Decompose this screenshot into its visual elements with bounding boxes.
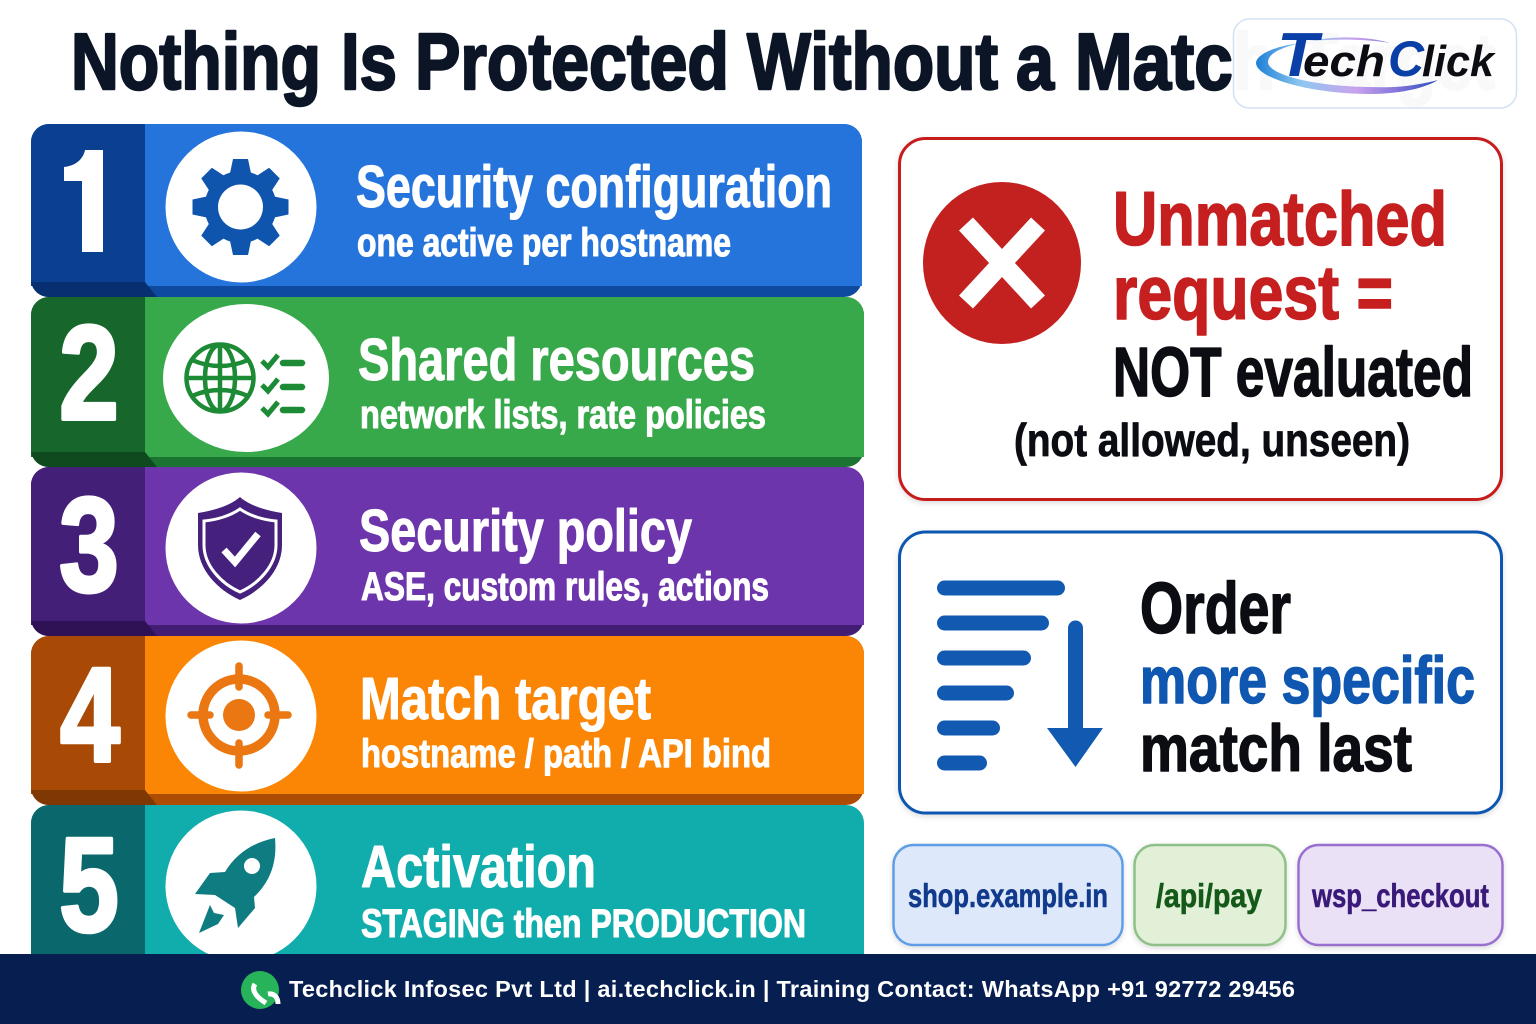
step 4: match target — [31, 636, 864, 805]
subheading: activation: STAGING then PRODUCTION — [361, 902, 806, 946]
logo wordmark — [1277, 21, 1496, 90]
text: order: Order — [1140, 569, 1291, 649]
text: not allowed, unseen: (not allowed, unseen) — [1014, 414, 1410, 466]
title: Is — [341, 17, 397, 106]
subheading: match target: hostname / path / API bind — [361, 732, 771, 776]
heading: shared resources: Shared resources — [358, 327, 755, 393]
heading: activation: Activation — [361, 834, 596, 900]
number 1 — [64, 150, 103, 252]
panel: order — [900, 532, 1502, 813]
title — [71, 17, 1495, 106]
title: Match — [1075, 17, 1275, 106]
number 4: 4 — [60, 640, 120, 790]
step 1: security configuration — [31, 124, 862, 297]
subheading: security configuration: one active per hostname — [357, 221, 731, 265]
logo swoosh — [1256, 37, 1438, 94]
footer bar — [0, 954, 1536, 1024]
title: Protected — [415, 17, 729, 106]
icon: target — [166, 640, 316, 792]
footer text: Techclick Infosec Pvt Ltd | ai.techclick.in | Training Contact: WhatsApp +91 92772 29456 — [289, 976, 1295, 1002]
title: a — [1016, 17, 1054, 106]
heading: security policy: Security policy — [359, 498, 692, 564]
step 2: shared resources — [31, 297, 864, 467]
icon: descending list with arrow — [937, 580, 1103, 770]
subheading: shared resources: network lists, rate policies — [360, 393, 766, 437]
text: request equals: request = — [1113, 251, 1393, 336]
number 5: 5 — [59, 810, 119, 960]
title: Target — [1298, 17, 1495, 106]
chip: path: /api/pay — [1156, 877, 1263, 914]
title: Without — [747, 17, 998, 106]
subheading: security policy: ASE, custom rules, actions — [361, 565, 769, 609]
number 1: 1 — [56, 126, 126, 282]
heading: security configuration: Security configuration — [356, 154, 832, 220]
number 2: 2 — [59, 298, 119, 448]
panel: unmatched request — [900, 138, 1502, 500]
step 3: security policy — [31, 467, 864, 636]
icon: whatsapp phone — [241, 971, 279, 1009]
logo wordmark: T — [1277, 21, 1324, 90]
icon: shield — [166, 472, 316, 624]
chip: policy: wsp_checkout — [1311, 877, 1489, 914]
icon: red cross — [923, 182, 1081, 344]
chip: hostname — [894, 845, 1122, 945]
chip: path — [1134, 845, 1286, 945]
heading: match target: Match target — [360, 666, 651, 732]
logo wordmark: lick — [1422, 37, 1496, 86]
chip: policy — [1298, 845, 1502, 945]
icon: gear — [166, 132, 316, 282]
logo card — [1234, 19, 1516, 108]
text: unmatched: Unmatched — [1113, 177, 1447, 262]
icon: rocket — [166, 810, 316, 962]
number 3: 3 — [59, 470, 119, 620]
text: match last: match last — [1140, 711, 1412, 785]
logo wordmark: ech — [1303, 37, 1385, 86]
chip: hostname: shop.example.in — [908, 877, 1108, 914]
icon: globe and checklist — [163, 304, 329, 452]
step 5: activation — [31, 805, 864, 962]
logo wordmark: C — [1388, 31, 1425, 87]
title: Nothing — [71, 17, 321, 106]
